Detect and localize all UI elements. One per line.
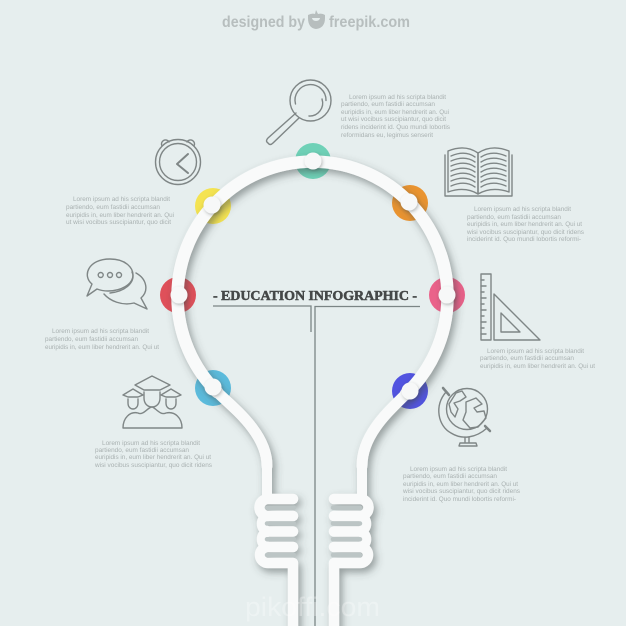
- text block: magnifying glass: partiendo, eum fastidii accumsan: [341, 101, 436, 108]
- left slots: [267, 508, 294, 555]
- text block: magnifying glass: ridens inciderint id. Quo mundi lobortis: [341, 124, 450, 131]
- left screw thread: [260, 499, 293, 626]
- knob: light blue: [204, 378, 222, 396]
- disc: indigo: [392, 373, 428, 409]
- text block: speech bubbles: partiendo, eum fastidii accumsan: [45, 336, 139, 343]
- icon: globe: [439, 388, 490, 446]
- screw thread slots: [267, 508, 360, 555]
- text block: book: Lorem ipsum ad his scripta blandit: [474, 206, 571, 213]
- knob: red: [170, 286, 188, 304]
- text block: graduates: euripidis in, eum liber hendrerit an. Qui ut: [95, 454, 211, 461]
- icon: ruler and set square: [481, 274, 540, 340]
- bulb lower curves: [217, 392, 406, 466]
- text block: book: [466, 206, 584, 243]
- text block: globe: inciderint id. Quo mundi lobortis reformi-: [403, 496, 516, 503]
- text block: magnifying glass: [341, 94, 450, 139]
- title rule and centre stem lines: [213, 306, 420, 626]
- bulb neck: [267, 466, 362, 499]
- text block: stopwatch: euripidis in, eum liber hendrerit an. Qui: [66, 212, 174, 219]
- knob: orange: [400, 194, 418, 210]
- text block: ruler: partiendo, eum fastidii accumsan: [480, 355, 575, 362]
- text block: magnifying glass: Lorem ipsum ad his scripta blandit: [349, 94, 446, 101]
- text block: stopwatch: partiendo, eum fastidii accumsan: [66, 204, 161, 211]
- disc: red: [160, 277, 196, 313]
- bulb glass arc: [178, 162, 448, 394]
- text block: stopwatch: [66, 196, 174, 226]
- text block: graduates: partiendo, eum fastidii accumsan: [95, 447, 190, 454]
- text block: ruler: Lorem ipsum ad his scripta blandit: [487, 348, 584, 355]
- disc: teal: [295, 143, 331, 179]
- text block: ruler: [480, 348, 595, 370]
- text block: stopwatch: Lorem ipsum ad his scripta blandit: [73, 196, 170, 203]
- watermark: pikoffi.com: [245, 592, 380, 622]
- credit text right: freepik.com: [329, 14, 410, 31]
- text block: graduates: wisi vocibus suscipiantur, quo dicit ridens: [94, 462, 212, 469]
- text block: speech bubbles: [45, 328, 159, 351]
- knob: indigo: [402, 382, 418, 400]
- text block: magnifying glass: reformidans eu, legimus senserit: [341, 132, 433, 139]
- text block: graduates: [94, 440, 212, 469]
- icon: stopwatch: [156, 140, 200, 184]
- text block: globe: Lorem ipsum ad his scripta blandit: [410, 466, 507, 473]
- icon: graduates: [123, 376, 182, 428]
- icon: open book: [445, 148, 512, 196]
- text block: stopwatch: ut wisi vocibus suscipiantur, quo dicit: [66, 219, 171, 226]
- text block: globe: euripidis in, eum liber hendrerit an. Qui ut: [403, 481, 518, 488]
- icon: magnifying glass: [266, 80, 331, 144]
- text block: magnifying glass: euripidis in, eum liber hendrerit an. Qui: [341, 109, 449, 116]
- text block: speech bubbles: Lorem ipsum ad his scripta blandit: [52, 328, 149, 335]
- text block: ruler: euripidis in, eum liber hendrerit an. Qui ut: [480, 363, 595, 370]
- knob: pink: [438, 286, 456, 304]
- knob: teal: [304, 152, 322, 170]
- white node knobs: [170, 152, 456, 400]
- text block: globe: partiendo, eum fastidii accumsan: [403, 473, 498, 480]
- text block: book: wisi vocibus suscipiantur, quo dicit ridens: [466, 229, 584, 236]
- rule left: [213, 306, 311, 332]
- text block: book: euripidis in, eum liber hendrerit an. Qui ut: [467, 221, 582, 228]
- right slots: [333, 508, 360, 555]
- disc: orange: [392, 185, 428, 221]
- icon: speech bubbles: [87, 259, 147, 309]
- text block: magnifying glass: ut wisi vocibus suscipiantur, quo dicit: [341, 116, 446, 123]
- disc: pink: [429, 277, 465, 313]
- right screw thread: [334, 499, 368, 626]
- text block: speech bubbles: euripidis in, eum liber hendrerit an. Qui ut: [45, 344, 159, 351]
- text block: globe: [402, 466, 520, 503]
- text block: globe: wisi vocibus suscipiantur, quo dicit ridens: [402, 488, 520, 495]
- disc: light blue: [195, 370, 231, 406]
- title: - EDUCATION INFOGRAPHIC -: [213, 289, 417, 304]
- freepik credit: [222, 10, 410, 31]
- credit text left: designed by: [222, 14, 305, 31]
- icon: freepik logo: [308, 10, 325, 29]
- coloured node discs: [160, 143, 465, 409]
- text block: book: partiendo, eum fastidii accumsan: [467, 214, 562, 221]
- text block: graduates: Lorem ipsum ad his scripta blandit: [102, 440, 200, 447]
- disc: yellow: [195, 188, 231, 224]
- light bulb outline: [178, 162, 448, 626]
- knob: yellow: [204, 196, 220, 214]
- rule right: [315, 306, 420, 626]
- text block: book: inciderint id. Quo mundi lobortis reformi-: [467, 236, 581, 243]
